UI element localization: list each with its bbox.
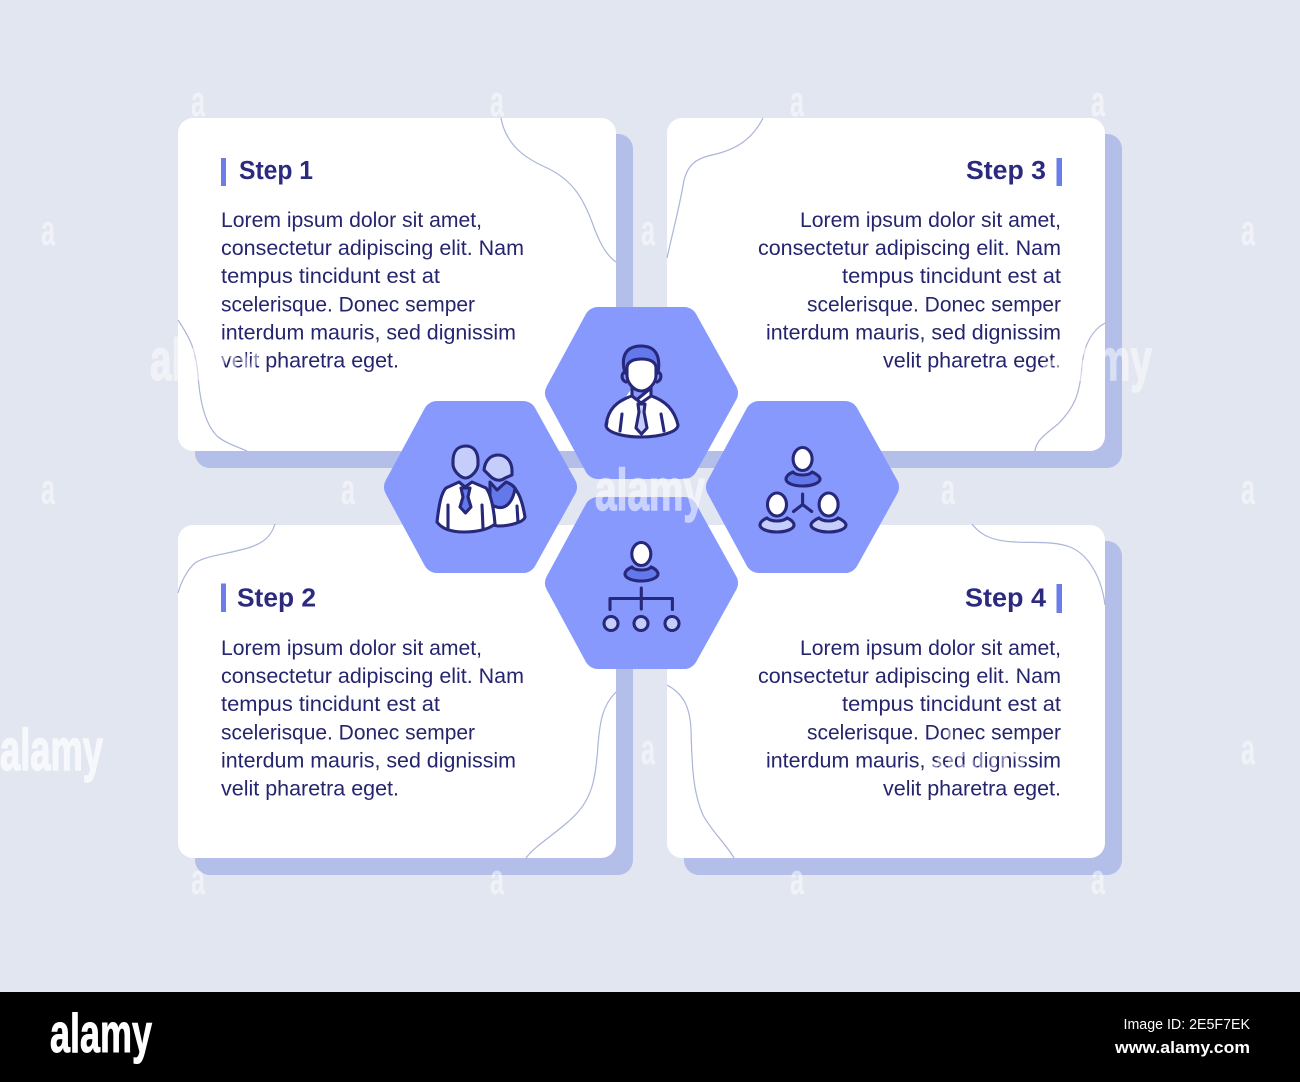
accent bar: step 2 xyxy=(221,584,226,612)
text block: step 2: interdum mauris, sed dignissim xyxy=(221,750,516,772)
watermark: a xyxy=(1091,77,1105,126)
decorative curve: step 2 top left xyxy=(178,524,275,593)
text block: step 3: Lorem ipsum dolor sit amet, xyxy=(800,209,1061,232)
text block: step 3: consectetur adipiscing elit. Nam xyxy=(758,237,1061,260)
icon: business team xyxy=(437,446,525,532)
image id: Image ID: 2E5F7EK xyxy=(1124,1016,1250,1033)
heading: step 1: Step 1 xyxy=(239,157,313,185)
hexagon: left xyxy=(398,415,563,559)
text block: step 4: interdum mauris, sed dignissim xyxy=(766,750,1061,772)
heading: step 4: Step 4 xyxy=(965,584,1047,612)
heading: step 2: Step 2 xyxy=(237,584,316,612)
hexagon: top xyxy=(559,321,724,465)
text block: step 4 xyxy=(758,637,1061,801)
text block: step 4: velit pharetra eget. xyxy=(883,778,1061,801)
watermark: a xyxy=(341,465,355,514)
accent bar: step 4 xyxy=(1056,584,1062,613)
watermark: a xyxy=(191,77,205,126)
watermark: alamy xyxy=(595,458,705,523)
text block: step 3: tempus tincidunt est at xyxy=(842,265,1061,288)
text block: step 4: consectetur adipiscing elit. Nam xyxy=(758,665,1061,688)
card shadow: step 3 xyxy=(684,134,1122,468)
text block: step 1: interdum mauris, sed dignissim xyxy=(221,322,516,344)
text block: step 1: Lorem ipsum dolor sit amet, xyxy=(221,209,482,232)
watermark: a xyxy=(1241,725,1255,774)
card: step 3 xyxy=(667,118,1105,451)
text block: step 1: consectetur adipiscing elit. Nam xyxy=(221,237,524,260)
watermark: a xyxy=(790,855,804,904)
text block: step 4: tempus tincidunt est at xyxy=(842,693,1061,716)
panel: step 1 xyxy=(178,118,633,468)
text block: step 4: scelerisque. Donec semper xyxy=(807,722,1061,744)
card shadow: step 1 xyxy=(195,134,633,468)
icon: businessman xyxy=(606,346,678,437)
decorative curve: step 1 bottom left xyxy=(178,320,247,451)
watermark: a xyxy=(1241,206,1255,255)
watermark: a xyxy=(641,206,655,255)
decorative curve: step 3 top left xyxy=(667,118,763,258)
decorative curve: step 4 bottom left xyxy=(667,685,734,858)
watermark: a xyxy=(790,77,804,126)
watermark: a xyxy=(191,855,205,904)
icon: organisation chart xyxy=(604,542,679,630)
text block: step 3 xyxy=(758,209,1061,373)
watermark: a xyxy=(41,206,55,255)
icon: team triangle xyxy=(760,448,846,532)
watermark: a xyxy=(641,725,655,774)
card: step 4 xyxy=(667,525,1105,858)
panel: step 3 xyxy=(667,118,1122,468)
text block: step 3: velit pharetra eget. xyxy=(883,350,1061,373)
card: step 1 xyxy=(178,118,616,451)
watermark: alamy xyxy=(0,718,103,783)
text block: step 2: velit pharetra eget. xyxy=(221,778,399,801)
watermark: a xyxy=(1091,855,1105,904)
text block: step 2 xyxy=(221,637,524,801)
decorative curve: step 1 top right xyxy=(501,118,616,262)
hexagon: bottom xyxy=(559,511,724,655)
text block: step 3: scelerisque. Donec semper xyxy=(807,294,1061,316)
text block: step 1: velit pharetra eget. xyxy=(221,350,399,373)
watermark: alamy xyxy=(925,718,1030,783)
watermark: a xyxy=(1241,465,1255,514)
watermark xyxy=(0,77,1255,904)
text block: step 1: tempus tincidunt est at xyxy=(221,265,440,288)
watermark: alamy xyxy=(150,328,260,393)
text block: step 2: tempus tincidunt est at xyxy=(221,693,440,716)
website: www.alamy.com xyxy=(1114,1038,1250,1057)
card shadow: step 4 xyxy=(684,541,1122,875)
panel: step 2 xyxy=(178,524,633,875)
heading: step 3: Step 3 xyxy=(966,157,1046,185)
text block: step 1 xyxy=(221,209,524,373)
card shadow: step 2 xyxy=(195,541,633,875)
text block: step 2: consectetur adipiscing elit. Nam xyxy=(221,665,524,688)
card: step 2 xyxy=(178,525,616,858)
text block: step 3: interdum mauris, sed dignissim xyxy=(766,322,1061,344)
decorative curve: step 4 top right xyxy=(972,524,1105,605)
decorative curve: step 3 bottom right xyxy=(1035,323,1105,451)
hexagon: right xyxy=(720,415,885,559)
decorative curve: step 2 bottom right xyxy=(526,692,616,858)
watermark: a xyxy=(490,855,504,904)
watermark: alamy xyxy=(1042,328,1152,393)
accent bar: step 1 xyxy=(221,158,226,186)
text block: step 4: Lorem ipsum dolor sit amet, xyxy=(800,637,1061,660)
panel: step 4 xyxy=(667,524,1122,875)
text block: step 2: Lorem ipsum dolor sit amet, xyxy=(221,637,482,660)
watermark: a xyxy=(41,465,55,514)
watermark: a xyxy=(490,77,504,126)
accent bar: step 3 xyxy=(1056,158,1062,186)
footer bar xyxy=(0,992,1300,1082)
watermark: a xyxy=(941,465,955,514)
text block: step 2: scelerisque. Donec semper xyxy=(221,722,475,744)
text block: step 1: scelerisque. Donec semper xyxy=(221,294,475,316)
footer logo: alamy xyxy=(50,1002,152,1064)
